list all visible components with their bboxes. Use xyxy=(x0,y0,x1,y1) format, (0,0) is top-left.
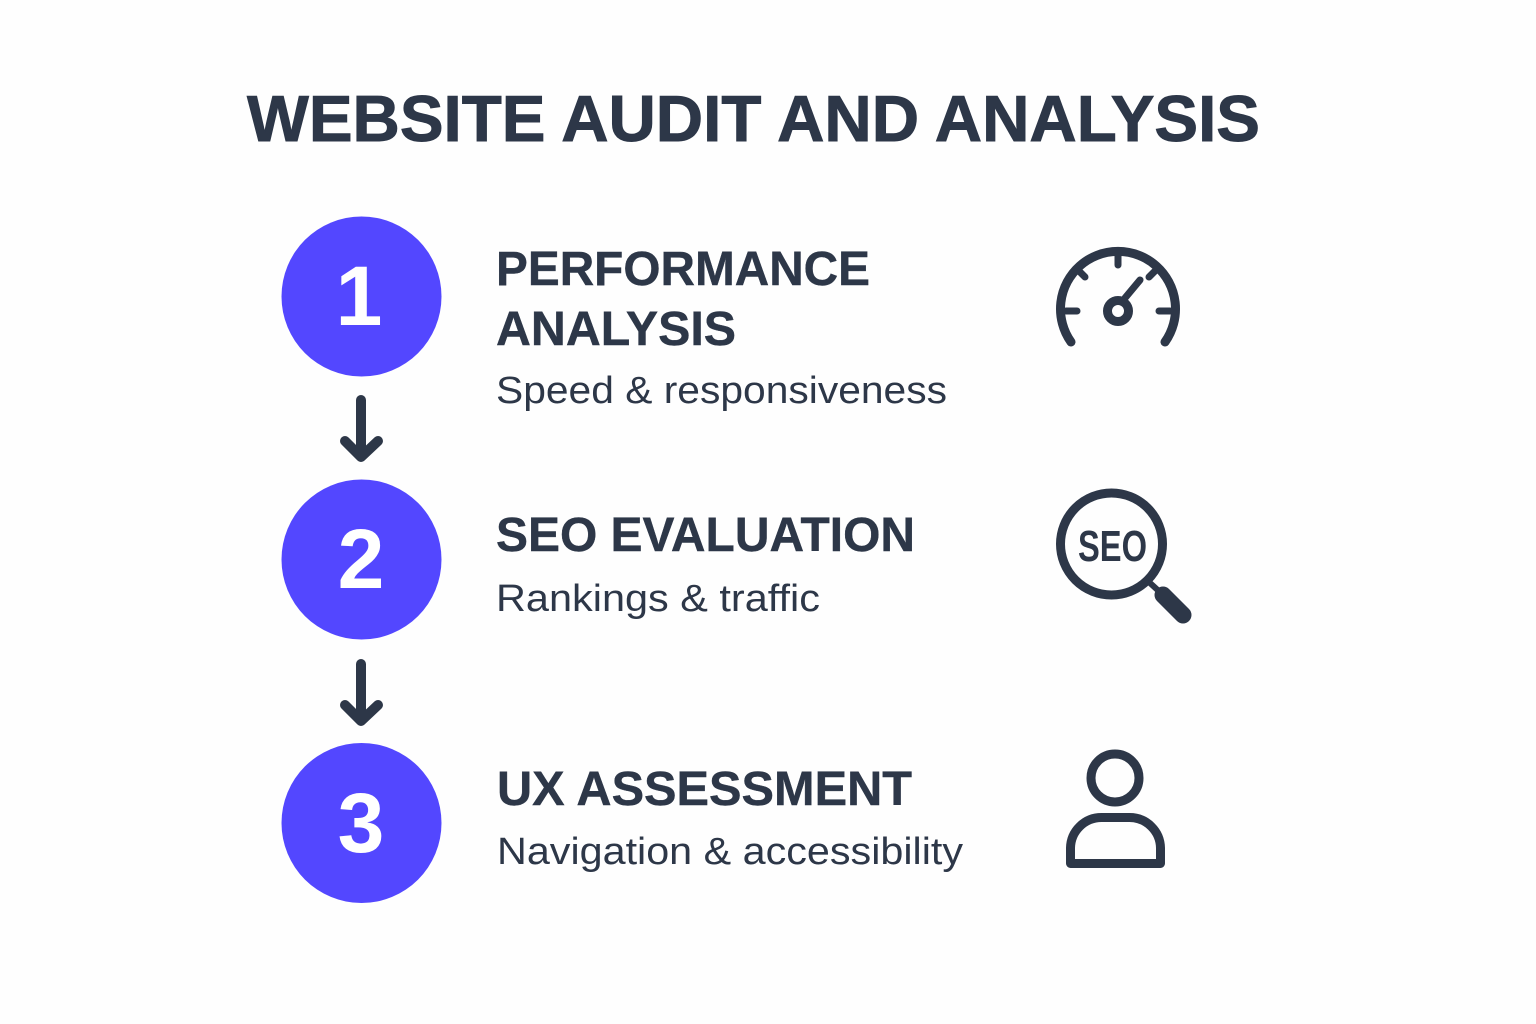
step 2 heading: SEO EVALUATION xyxy=(496,509,915,562)
step 3 number badge xyxy=(282,743,442,903)
arrow: step 1 to 2 xyxy=(345,400,378,457)
step 3 number badge: 3 xyxy=(338,776,384,870)
step 1 number badge xyxy=(282,216,442,376)
step 1 text xyxy=(496,243,947,412)
step 3 heading: UX ASSESSMENT xyxy=(497,763,912,816)
icon: user xyxy=(1070,754,1160,864)
step 2 number badge xyxy=(282,480,442,640)
step 1 number badge: 1 xyxy=(336,249,382,343)
step 1 heading: PERFORMANCE xyxy=(496,243,870,296)
step 2 text xyxy=(496,509,915,620)
icon: SEO magnifier xyxy=(1060,493,1183,615)
icon: speedometer xyxy=(1060,251,1175,342)
icon: SEO magnifier: SEO xyxy=(1078,522,1147,571)
title: WEBSITE AUDIT AND ANALYSIS xyxy=(247,82,1260,155)
step 3 description: Navigation & accessibility xyxy=(497,831,963,873)
step 2 number badge: 2 xyxy=(338,512,384,606)
step 1 heading: ANALYSIS xyxy=(496,303,736,356)
step 1 description: Speed & responsiveness xyxy=(496,370,947,412)
step 2 description: Rankings & traffic xyxy=(496,578,820,620)
step 1 heading xyxy=(496,243,870,356)
arrow: step 2 to 3 xyxy=(345,664,378,721)
step 3 text xyxy=(497,763,963,873)
